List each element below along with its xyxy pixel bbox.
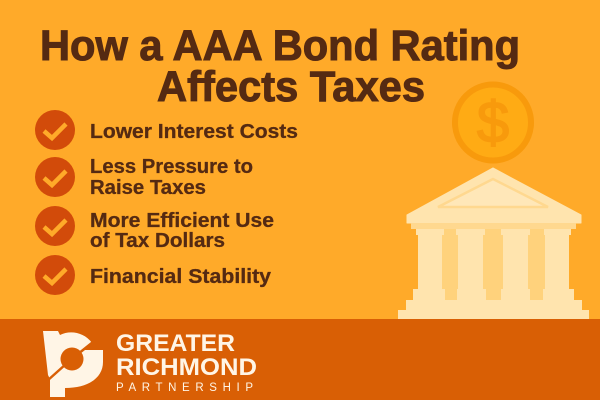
logo wordmark: RICHMOND	[116, 354, 257, 381]
title: How a AAA Bond Rating	[40, 22, 520, 70]
item: lower interest costs: Lower Interest Costs	[90, 120, 298, 143]
roof	[407, 168, 581, 223]
logo wordmark: GREATER	[116, 330, 235, 357]
pediment	[438, 179, 548, 207]
footer band	[0, 319, 600, 400]
logo wordmark	[116, 330, 257, 394]
icon: dollar coin	[455, 84, 531, 160]
icon: bank building	[398, 168, 589, 320]
item: more efficient use of tax dollars: More Efficient Use	[90, 209, 274, 232]
item: more efficient use of tax dollars	[35, 206, 274, 252]
icon: dollar coin: $	[477, 90, 509, 155]
logo wordmark: PARTNERSHIP	[116, 382, 253, 394]
item: financial stability: Financial Stability	[90, 265, 272, 288]
shadowed recess between columns	[441, 229, 547, 301]
steps	[406, 300, 582, 310]
item: more efficient use of tax dollars: of Tax Dollars	[90, 229, 225, 252]
item: less pressure to raise taxes: Raise Taxes	[90, 176, 206, 199]
item: less pressure to raise taxes: Less Pressure to	[90, 155, 253, 178]
item: lower interest costs	[35, 110, 298, 150]
item: financial stability	[35, 255, 272, 295]
item: less pressure to raise taxes	[35, 155, 253, 199]
title	[40, 22, 520, 111]
columns	[413, 229, 574, 301]
title: Affects Taxes	[157, 63, 425, 111]
logo mark	[43, 331, 103, 397]
checklist	[35, 110, 298, 295]
